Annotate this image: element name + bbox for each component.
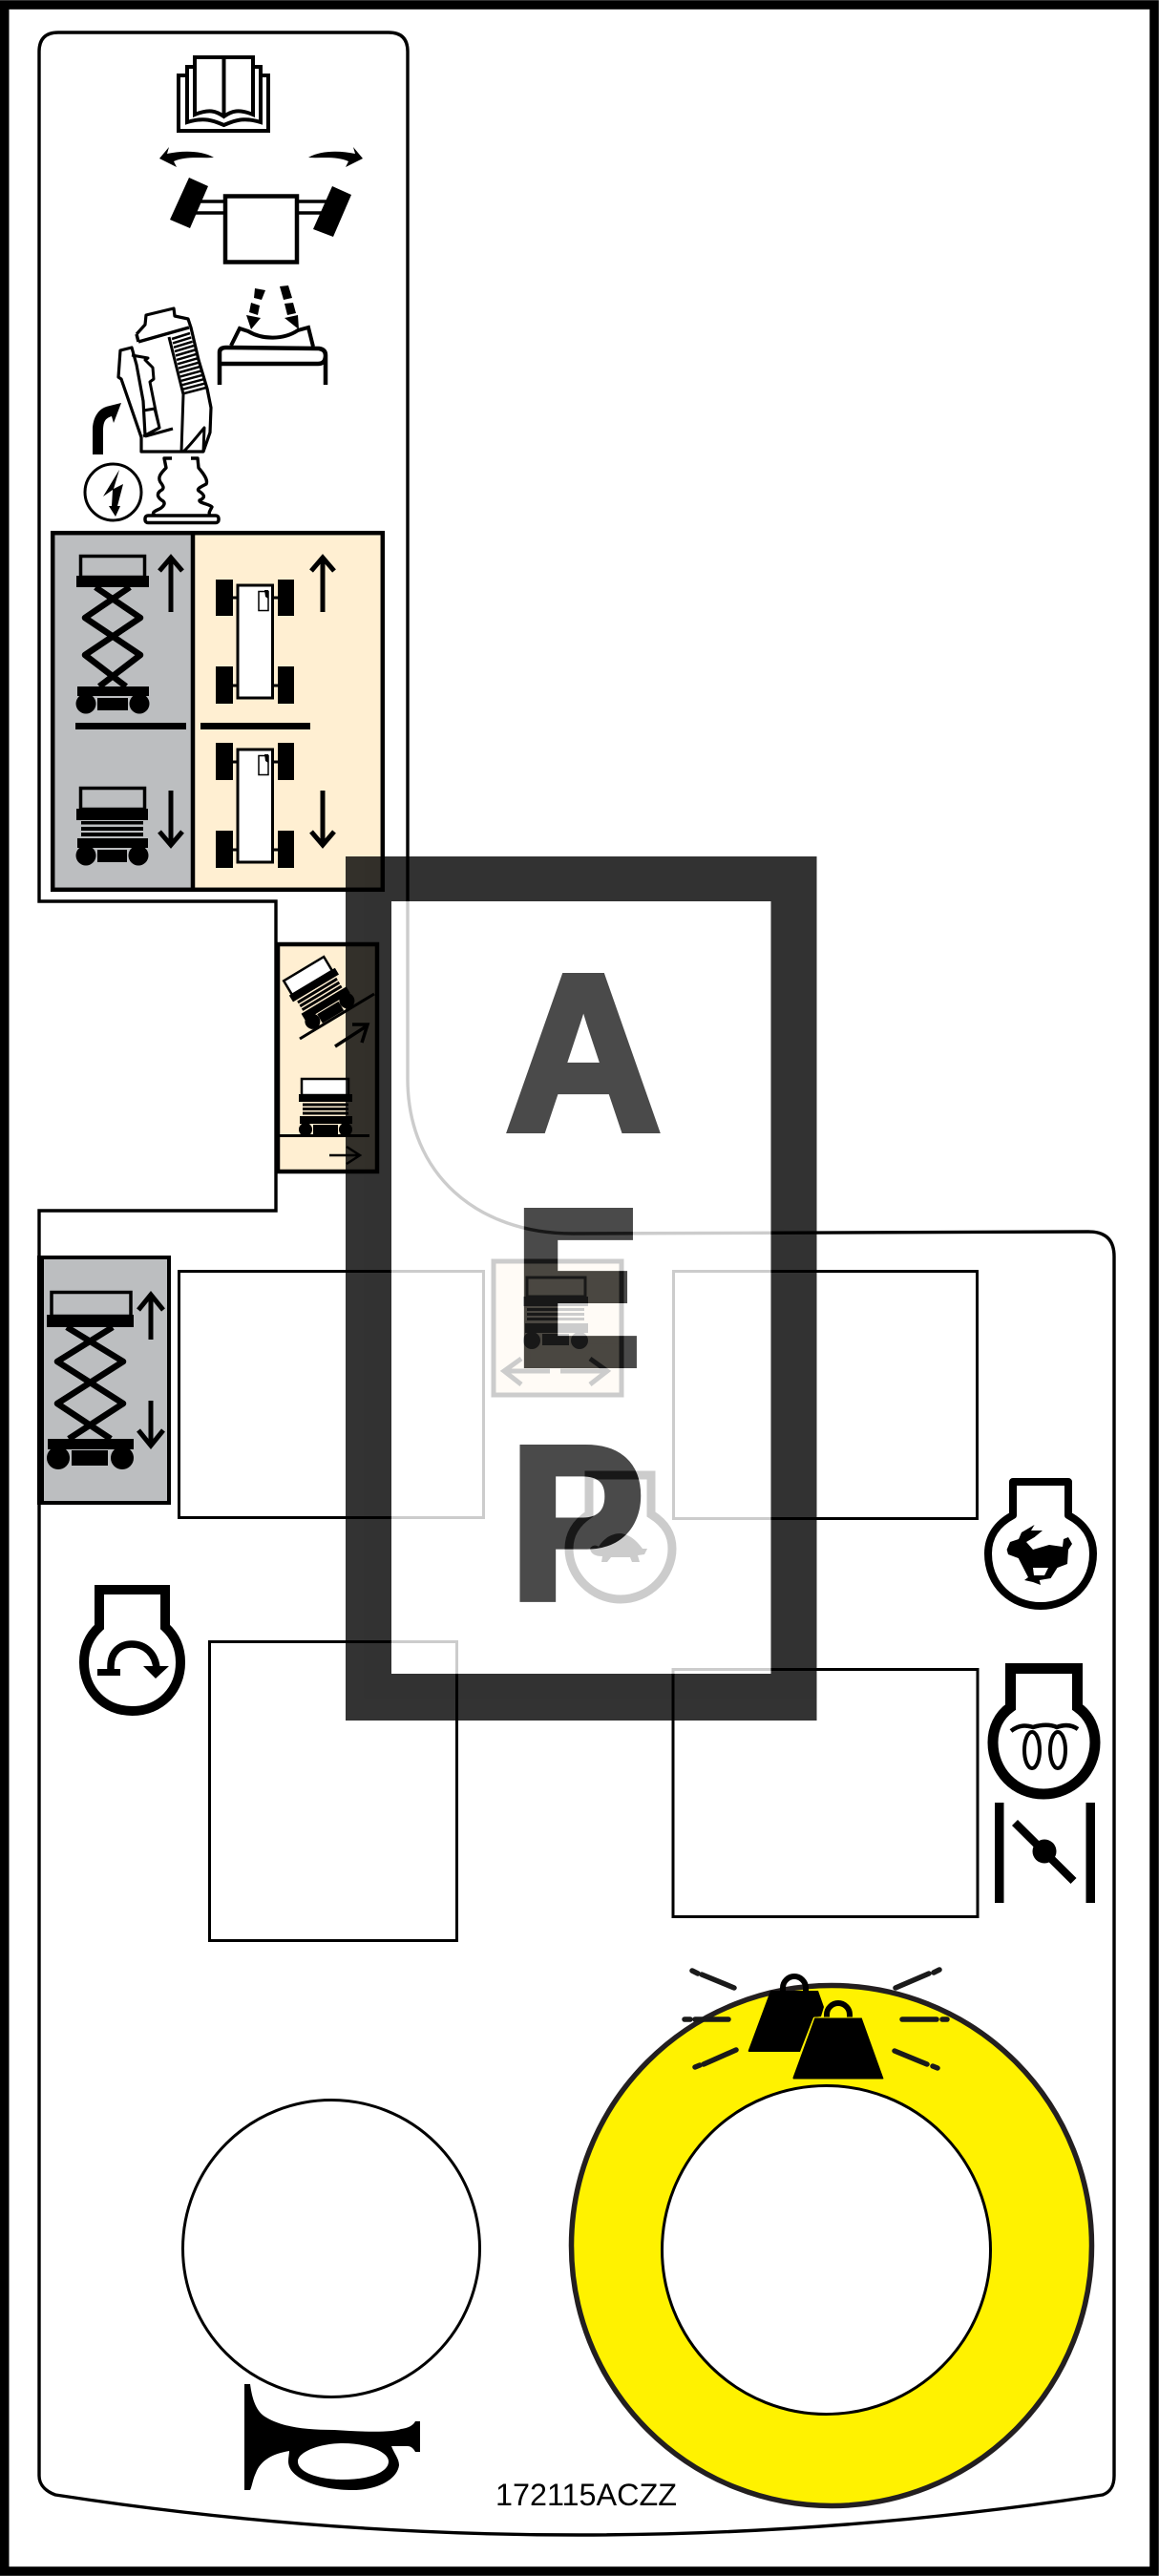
- ground line: [280, 1134, 369, 1137]
- divider bars: [75, 723, 310, 729]
- arrow: drive forward: [311, 558, 334, 612]
- arrow: lift up: [159, 558, 182, 612]
- panel: lift and drive functions: [53, 531, 383, 892]
- icon: joystick controller: [118, 308, 219, 523]
- rubber boot: [153, 458, 212, 517]
- arrow: down: [138, 1401, 163, 1446]
- arrow: up: [138, 1295, 163, 1340]
- panel: slope drive mode: [278, 944, 377, 1172]
- AEP watermark overlay: [346, 856, 817, 1721]
- part number: 172115ACZZ: [495, 2478, 677, 2512]
- icon: scissor lift: [47, 1293, 134, 1469]
- panel: lift enable: [40, 1256, 169, 1505]
- icon: lowered scissor lift: [76, 789, 149, 865]
- icon: throttle butterfly valve: [995, 1803, 1095, 1903]
- icon: drive reverse machine top view: [216, 743, 294, 868]
- slope line: [300, 994, 374, 1039]
- icon: engine fast rabbit: [988, 1482, 1093, 1606]
- arrow: lift down: [159, 791, 182, 845]
- letter A: A: [506, 929, 661, 1177]
- panel: sideways drive mode: [494, 1261, 622, 1395]
- arrow: drive reverse: [311, 791, 334, 845]
- button cutout: lift/drive left: [179, 1272, 483, 1518]
- icon: curved up arrow: [93, 403, 121, 454]
- button cutout: lower left: [210, 1642, 456, 1940]
- icon: power bolt in circle: [85, 464, 141, 520]
- button cutout: lower right: [673, 1669, 978, 1917]
- icon: manual book: [179, 57, 268, 131]
- arrows: left and right: [504, 1359, 607, 1384]
- emergency stop yellow ring: [571, 1986, 1092, 2505]
- icon: glow plug coil: [993, 1669, 1095, 1794]
- letter P: P: [510, 1401, 644, 1645]
- joystick body: [118, 308, 211, 452]
- arrow: flat direction: [329, 1147, 360, 1164]
- icon: engine slow turtle: [569, 1475, 672, 1599]
- icon: horn: [244, 2384, 420, 2490]
- icon: engine start: [84, 1590, 180, 1711]
- letter E: E: [515, 1163, 641, 1411]
- icon: drive forward machine top view: [216, 580, 294, 704]
- icon: lift on flat ground: [299, 1079, 352, 1136]
- icon: lift on slope: [281, 954, 357, 1032]
- button cutout: upper right: [674, 1272, 978, 1518]
- icon: raised scissor lift: [76, 556, 149, 714]
- arrow: slope direction: [335, 1024, 368, 1046]
- icon: steering arrows and chassis: [159, 147, 363, 262]
- horn button cutout: [183, 2101, 479, 2397]
- icon: overload weights with impact ticks: [685, 1970, 947, 2080]
- icon: stowed lift: [523, 1277, 588, 1349]
- icon: controller on stand with dashed arrows: [220, 285, 326, 385]
